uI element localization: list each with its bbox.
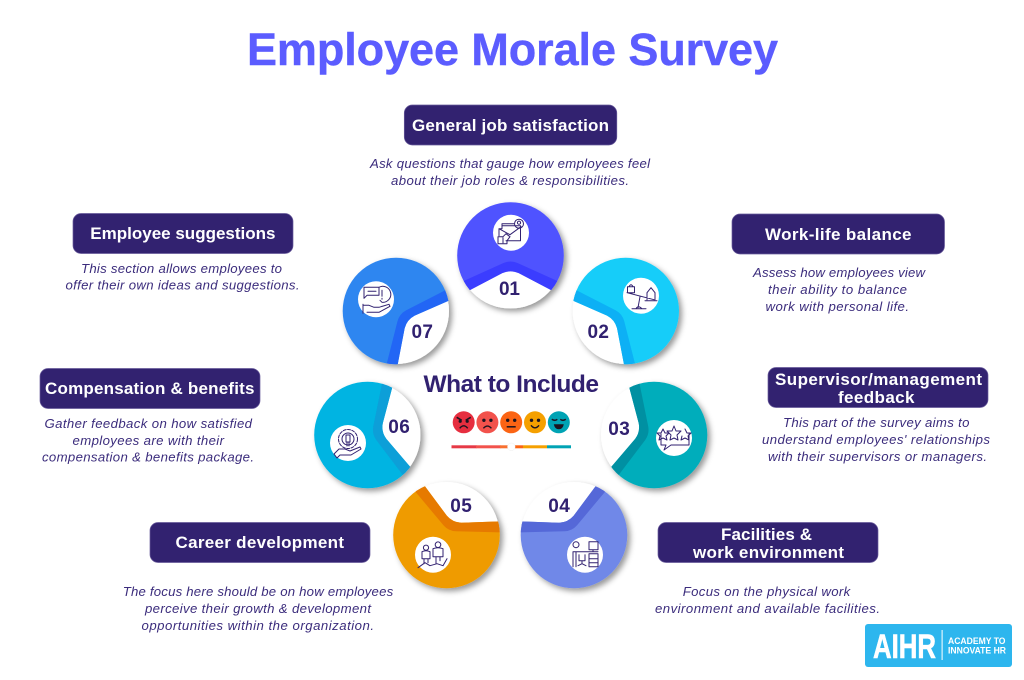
text: compensation: Gather feedback on how satisfied	[44, 416, 253, 431]
text: employee suggestions: This section allows employees to	[81, 261, 282, 276]
number 06: 06	[388, 417, 410, 438]
scale slider	[452, 443, 571, 451]
number 02: 02	[588, 322, 609, 343]
icon: balance scale	[623, 278, 659, 314]
disc 01	[456, 202, 570, 316]
number 05: 05	[450, 496, 472, 517]
logo: AIHR: INNOVATE HR	[948, 646, 1006, 656]
text: employee suggestions: offer their own ideas and suggestions.	[66, 278, 300, 292]
text: career development	[123, 584, 394, 633]
text: work-life balance: their ability to balance	[768, 282, 907, 297]
icon: briefcase with person	[493, 215, 529, 251]
heading: supervisor/management feedback: feedback	[838, 388, 915, 407]
icon: two people with rising arrow	[415, 537, 451, 573]
heading: work-life balance: Work-life balance	[765, 225, 912, 244]
text: compensation: employees are with their	[72, 433, 225, 448]
text: supervisor feedback: understand employees' relationships	[762, 432, 990, 447]
logo: AIHR	[865, 624, 1012, 667]
icon: stars in speech bubble	[656, 420, 692, 456]
disc 07	[342, 257, 456, 371]
panel: 03 supervisor feedback	[762, 368, 990, 464]
heading: compensation and benefits	[40, 368, 260, 408]
text: facilities	[655, 584, 880, 616]
panel: 05 career development	[123, 522, 394, 633]
text: work-life balance: work with personal life.	[766, 299, 909, 314]
text: compensation	[42, 416, 254, 464]
text: career development: The focus here should be on how employees	[123, 584, 394, 599]
number 07: 07	[412, 322, 433, 343]
text: career development: perceive their growth & development	[144, 601, 372, 616]
title: Employee Morale Survey	[247, 24, 778, 75]
text: employee suggestions	[66, 261, 300, 292]
disc 02	[572, 257, 686, 371]
emoji scale	[453, 411, 570, 433]
panel: 02 work-life balance	[732, 214, 944, 314]
heading: supervisor/management feedback: Supervisor/management	[775, 370, 982, 389]
disc 06	[314, 381, 427, 495]
heading: employee suggestions	[73, 214, 293, 254]
text: work-life balance	[752, 265, 926, 314]
text: general job satisfaction	[369, 156, 651, 188]
text: supervisor feedback: This part of the survey aims to	[783, 415, 970, 430]
icon: hand with speech bubble	[358, 281, 394, 317]
disc 04	[520, 481, 634, 595]
text: general job satisfaction: Ask questions that gauge how employees feel	[369, 156, 651, 171]
heading: facilities and work environment: work environment	[692, 543, 844, 562]
disc 03	[600, 381, 714, 495]
text: supervisor feedback: with their supervisors or managers.	[768, 449, 987, 464]
heading: supervisor/management feedback	[768, 368, 988, 408]
icon: office desk	[567, 537, 603, 573]
face: angry	[453, 411, 475, 433]
logo: AIHR: ACADEMY TO	[948, 636, 1006, 647]
text: facilities: Focus on the physical work	[683, 584, 852, 599]
number 01: 01	[499, 279, 520, 300]
number 03: 03	[608, 419, 630, 440]
text: general job satisfaction: about their job roles & responsibilities.	[391, 173, 629, 188]
panel: 04 facilities	[655, 522, 880, 616]
text: work-life balance: Assess how employees view	[752, 265, 926, 280]
heading: employee suggestions: Employee suggestions	[90, 224, 276, 243]
heading: facilities and work environment: Facilities &	[721, 525, 812, 544]
panel: 06 compensation	[40, 368, 260, 464]
text: facilities: environment and available facilities.	[655, 601, 880, 616]
heading: career development: Career development	[176, 533, 344, 552]
text: supervisor feedback	[762, 415, 990, 464]
face: happy	[524, 411, 546, 433]
face: neutral	[500, 411, 522, 433]
logo: AIHR: AIHR	[873, 628, 936, 666]
heading: facilities and work environment	[658, 522, 878, 562]
center title: what to include: What to Include	[424, 371, 599, 398]
heading: general job satisfaction: General job satisfaction	[412, 116, 609, 135]
disc 05	[392, 481, 506, 595]
heading: work-life balance	[732, 214, 944, 254]
heading: compensation and benefits: Compensation & benefits	[45, 379, 254, 398]
text: career development: opportunities within the organization.	[142, 618, 374, 633]
face: very happy	[548, 411, 570, 433]
number 04: 04	[548, 496, 570, 517]
panel: 01 general job satisfaction	[369, 105, 651, 188]
heading: career development	[150, 522, 370, 562]
face: sad	[476, 411, 498, 433]
heading: general job satisfaction	[404, 105, 617, 145]
panel: 07 employee suggestions	[66, 214, 300, 292]
text: compensation: compensation & benefits package.	[42, 450, 254, 464]
icon: hand holding gear and person	[330, 425, 366, 461]
